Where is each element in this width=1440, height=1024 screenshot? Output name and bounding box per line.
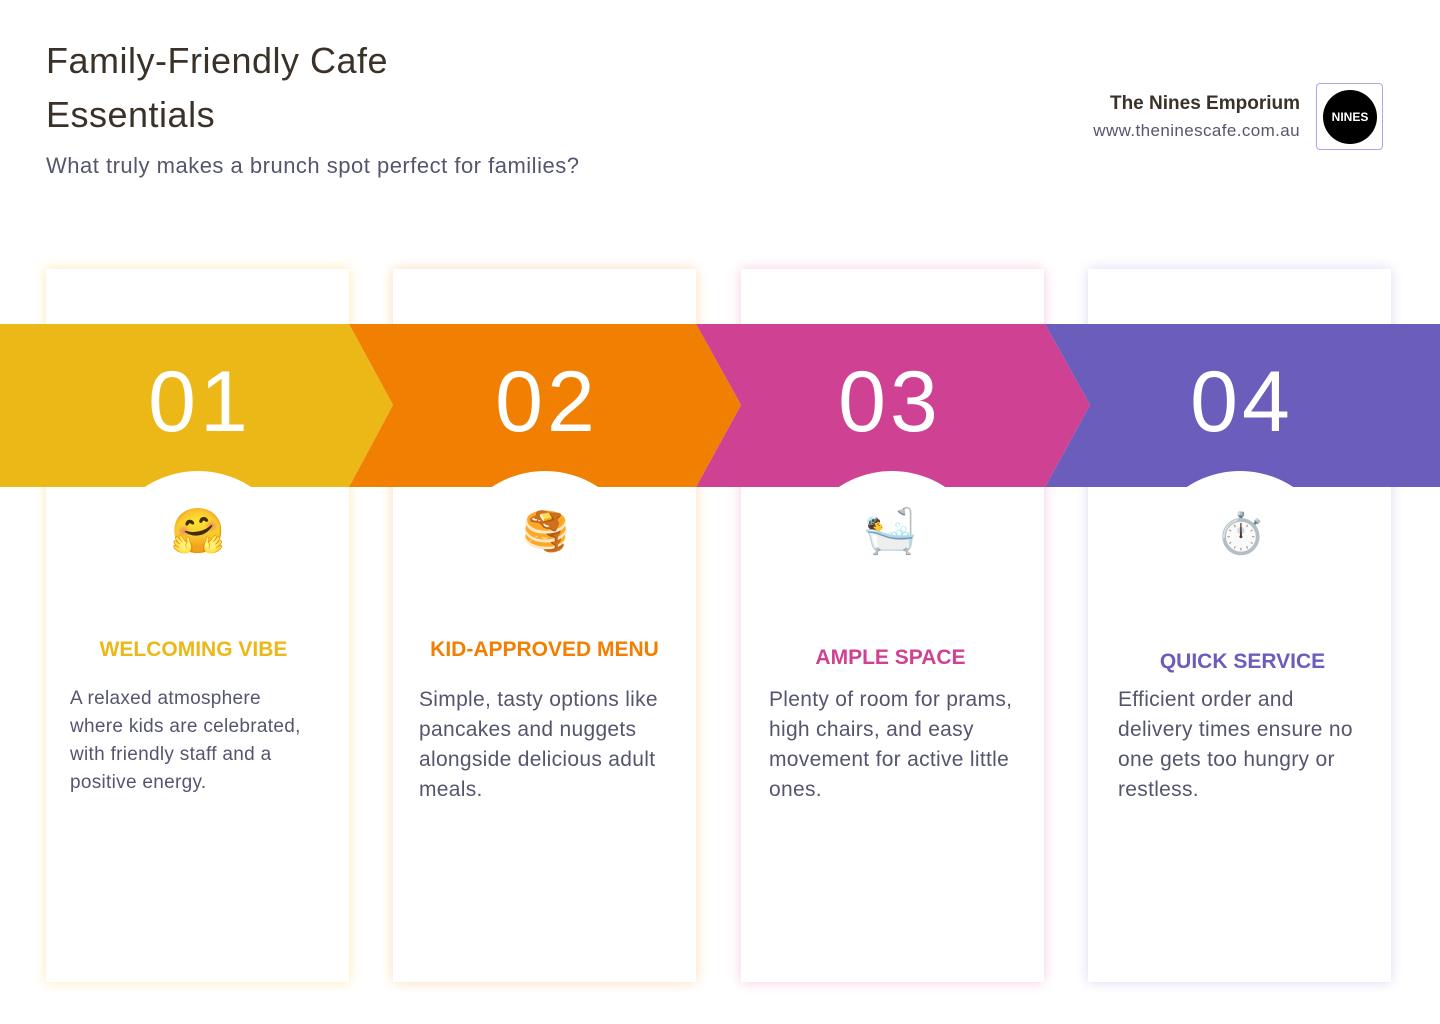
text: ones. <box>769 778 822 801</box>
text: high chairs, and easy <box>769 718 974 741</box>
title <box>46 40 388 135</box>
text: Simple, tasty options like <box>419 688 658 711</box>
text: pancakes and nuggets <box>419 718 636 741</box>
text: 🛀 <box>863 505 917 557</box>
brand <box>1093 93 1300 140</box>
title: Essentials <box>46 94 215 135</box>
numbers: 01 <box>148 354 252 450</box>
text: 03 <box>838 354 942 450</box>
text: movement for active little <box>769 748 1009 771</box>
card 1 text: WELCOMING VIBE <box>100 638 287 661</box>
text: positive energy. <box>70 772 206 793</box>
text: where kids are celebrated, <box>70 716 301 737</box>
subtitle: What truly makes a brunch spot perfect for families? <box>46 153 579 178</box>
text: restless. <box>1118 778 1199 801</box>
cards <box>46 269 349 982</box>
text: 🥞 <box>522 510 570 554</box>
title: Family-Friendly Cafe <box>46 40 388 81</box>
text: Efficient order and <box>1118 688 1294 711</box>
brand: www.theninescafe.com.au <box>1093 121 1300 140</box>
text: A relaxed atmosphere <box>70 688 261 709</box>
brand: The Nines Emporium <box>1110 93 1300 114</box>
text: 04 <box>1190 354 1294 450</box>
logo: NINES <box>1332 110 1368 124</box>
text: with friendly staff and a <box>70 744 271 765</box>
text: delivery times ensure no <box>1118 718 1353 741</box>
text: 02 <box>495 354 599 450</box>
icons: 🤗 <box>171 505 225 557</box>
card 4 text: QUICK SERVICE <box>1160 650 1325 673</box>
logo <box>1316 83 1383 150</box>
text: ⏱️ <box>1216 510 1266 557</box>
text: one gets too hungry or <box>1118 748 1335 771</box>
text: alongside delicious adult <box>419 748 655 771</box>
text: meals. <box>419 778 483 801</box>
text: Plenty of room for prams, <box>769 688 1012 711</box>
card 2 text: KID-APPROVED MENU <box>430 638 659 661</box>
card 3 text: AMPLE SPACE <box>815 646 966 669</box>
